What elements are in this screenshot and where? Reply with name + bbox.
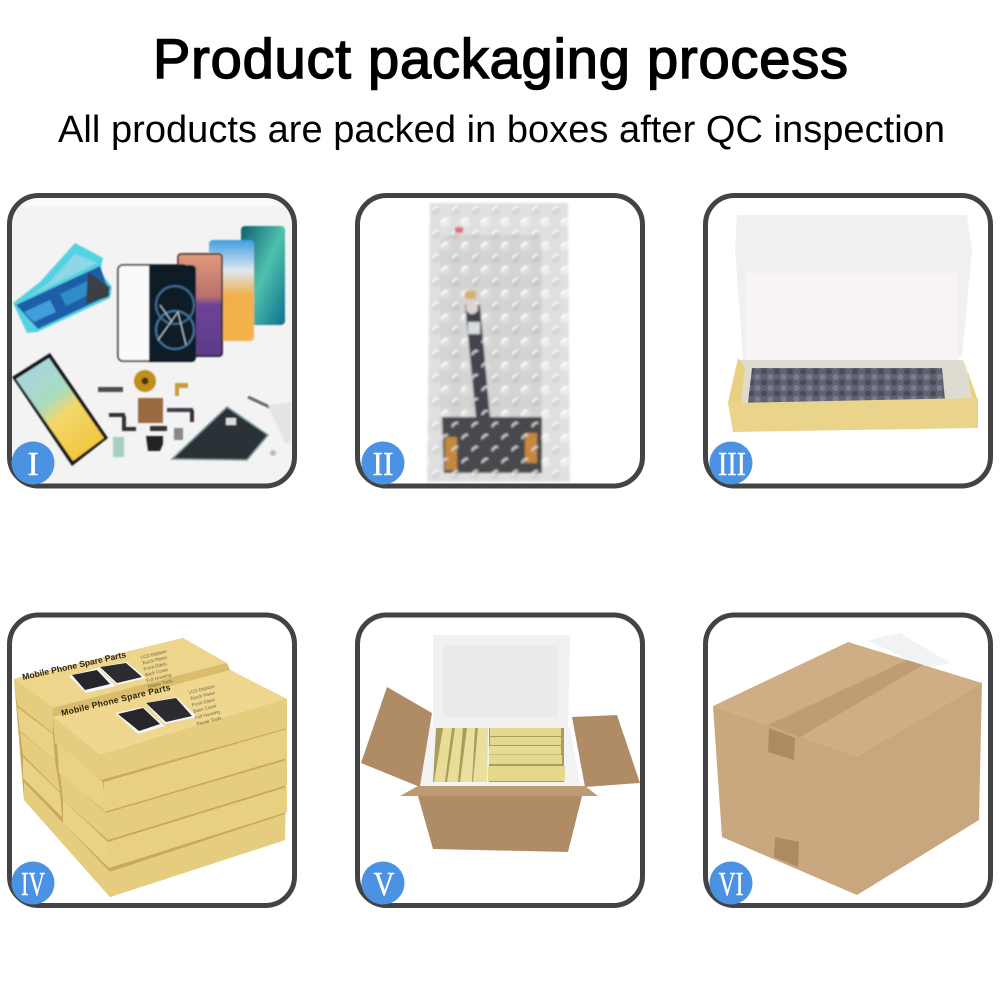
panel: VI closed carton — [706, 615, 990, 906]
panel: I parts — [10, 196, 294, 486]
badge III — [710, 442, 752, 484]
checklist text: Touch Panel — [190, 690, 215, 701]
checklist text: Touch Panel — [141, 655, 167, 666]
panel: V open carton — [358, 615, 642, 906]
checklist text — [140, 648, 224, 727]
checklist text: Front Glass — [191, 697, 216, 708]
badge IV: IV — [21, 866, 45, 903]
panel: II bubble bag — [358, 196, 642, 486]
badge V — [362, 862, 404, 904]
icon: phone in bag — [440, 227, 542, 473]
badge I: I — [27, 446, 39, 483]
checklist text: Front Glass — [143, 661, 168, 672]
checklist text: Full Housing — [194, 709, 221, 720]
checklist text: LCD Digitizer — [140, 648, 168, 660]
icon: yellow boxes in carton — [433, 728, 565, 782]
badge II: II — [372, 446, 394, 483]
badge VI — [710, 862, 752, 904]
checklist text: Back Cover — [144, 667, 169, 677]
subtitle: All products are packed in boxes after QC inspection — [58, 109, 945, 151]
icon: flex cable — [442, 291, 542, 473]
badge IV — [12, 862, 54, 904]
badge I — [12, 442, 54, 484]
title: Product packaging process — [153, 27, 848, 90]
checklist text: LCD Digitizer — [188, 683, 216, 695]
box label text: Mobile Phone Spare Parts — [60, 682, 172, 718]
icon: frame seal — [13, 243, 112, 333]
panel: IV stacked boxes — [10, 615, 294, 906]
badge V: V — [374, 866, 395, 903]
icon: broken phone — [12, 353, 108, 466]
icon: printed phones on box — [69, 662, 197, 734]
badge VI: VI — [718, 866, 744, 903]
checklist text: Repair Tools — [147, 678, 174, 689]
badge II — [362, 442, 404, 484]
checklist text: Full Housing — [146, 672, 172, 683]
icon: components — [98, 370, 291, 460]
box label text — [21, 649, 172, 718]
checklist text: Back Cover — [193, 703, 217, 714]
checklist text: Repair Tools — [196, 715, 222, 727]
icon: phones — [118, 226, 285, 362]
badge III: III — [718, 446, 746, 483]
box label text: Mobile Phone Spare Parts — [21, 649, 127, 682]
panel: III open box — [706, 196, 990, 486]
